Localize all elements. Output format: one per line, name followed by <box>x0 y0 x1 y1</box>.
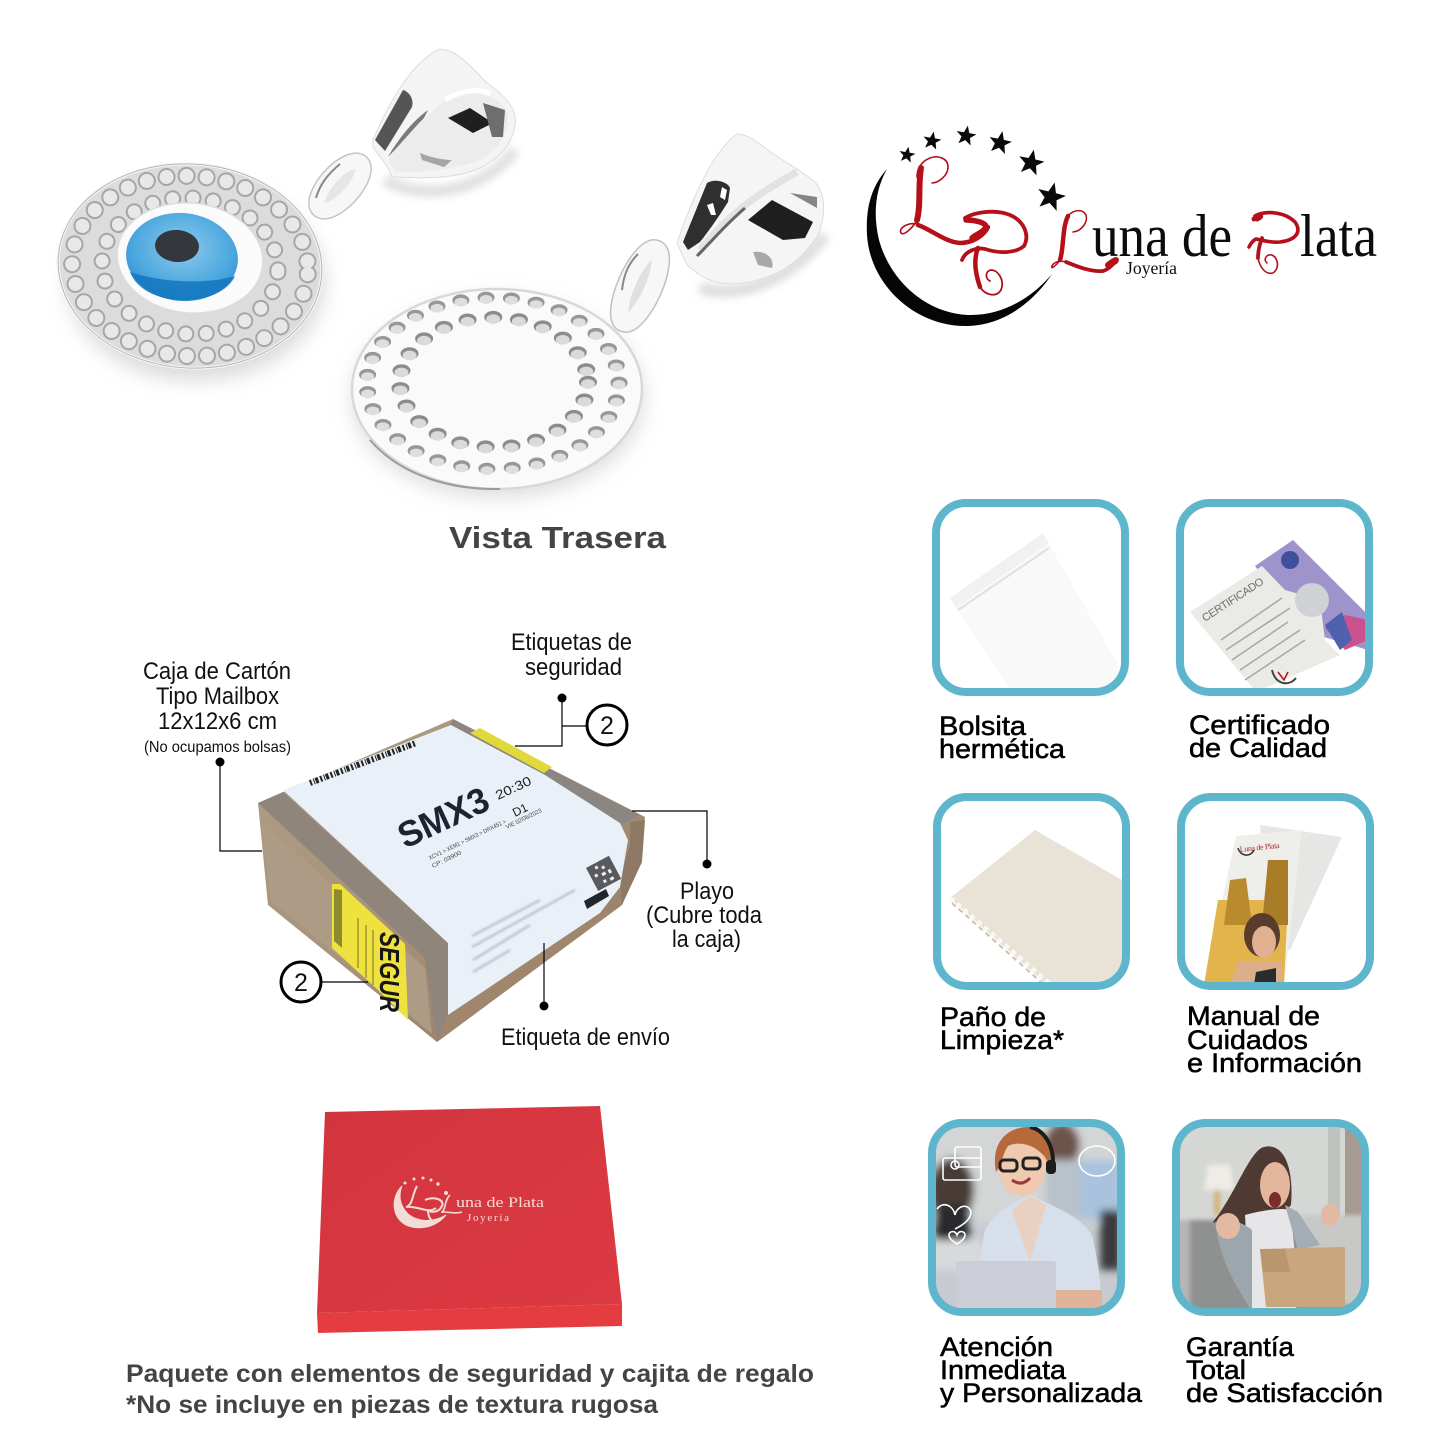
label: Certificado <box>1189 710 1330 740</box>
callout: Playo <box>632 811 763 953</box>
panel: Paño de Limpieza: Limpieza* <box>940 1025 1065 1055</box>
callout: Caja de Cartón: 12x12x6 cm <box>158 708 277 735</box>
callout: Caja de Cartón: Caja de Cartón <box>143 658 291 685</box>
label: Garantía <box>1186 1332 1295 1362</box>
box body <box>258 719 645 1042</box>
label: Paño de <box>940 1002 1046 1032</box>
bail <box>373 49 515 178</box>
icon: plastic bag <box>950 533 1050 611</box>
panel: Manual de Cuidados <box>1181 797 1370 1078</box>
heading: Vista Trasera: Vista Trasera <box>449 520 667 555</box>
callout: Playo: la caja) <box>672 926 741 953</box>
pendant: back view <box>352 134 825 498</box>
icon: certificate: CERTIFICADO <box>1200 575 1267 625</box>
red gift box: una de Plata <box>456 1195 544 1211</box>
panel: Atención Inmediata: y Personalizada <box>940 1378 1143 1408</box>
yellow security seal top <box>470 728 552 773</box>
callouts for box <box>143 629 763 1051</box>
panel: Manual de Cuidados: e Información <box>1187 1048 1362 1078</box>
label: Manual de <box>1187 1001 1320 1031</box>
callout: Caja de Cartón: (No ocupamos bolsas) <box>144 739 291 756</box>
panel: Atención Inmediata: Inmediata <box>940 1355 1067 1385</box>
callout: Etiqueta de envío <box>501 943 670 1051</box>
logo: Luna de Plata: Joyería <box>1126 258 1177 278</box>
panel: Paño de Limpieza <box>937 797 1126 1055</box>
gift box logo <box>394 1176 462 1228</box>
panel: Garantía Total: de Satisfacción <box>1186 1378 1383 1408</box>
shipping label <box>283 725 628 1015</box>
label text: SMX3 <box>391 779 495 856</box>
label: Atención <box>940 1332 1053 1362</box>
disc with stones <box>51 155 329 377</box>
icon: certificate <box>1190 540 1368 692</box>
crescent moon <box>867 169 1052 326</box>
panel: Bolsita hermética <box>936 503 1125 764</box>
shipping box photo: XCV1 > XEM1 > SMX3 > DRX451 > <box>428 819 508 862</box>
panel: Manual de Cuidados: Cuidados <box>1187 1025 1308 1055</box>
link ring <box>310 154 370 218</box>
shipping box photo: CP: 03900 <box>431 850 463 870</box>
pendant: front view with evil eye <box>51 49 515 380</box>
shipping box photo: 20:30 <box>493 773 534 803</box>
shipping box photo: SEGUR <box>374 932 405 1013</box>
callout: side seal count: 2 <box>294 969 308 997</box>
shipping box photo: VIE 02/06/2023 <box>505 808 543 831</box>
callout: Etiqueta de envío: Etiqueta de envío <box>501 1024 670 1051</box>
blurred address <box>472 890 575 972</box>
logo: Luna de Plata <box>867 124 1377 326</box>
icon: brochures <box>1204 825 1342 985</box>
panel: Bolsita hermética: hermética <box>939 734 1066 764</box>
caption: package: *No se incluye en piezas de textura rugosa <box>126 1391 659 1419</box>
panel: Certificado de Calidad <box>1180 503 1369 763</box>
QR code <box>586 856 621 891</box>
label: Bolsita <box>939 711 1027 741</box>
red gift box <box>317 1106 622 1333</box>
callout: Playo: Playo <box>680 878 734 905</box>
wordmark P <box>1249 213 1298 273</box>
shipping box photo: D1 <box>510 800 530 820</box>
stars <box>898 124 1068 212</box>
callout: Caja de Cartón <box>143 658 291 851</box>
photo: support agent <box>930 1123 1121 1313</box>
callout: Etiquetas de seguridad: seguridad <box>525 654 622 681</box>
callout: Etiquetas de seguridad <box>511 629 632 746</box>
wordmark L <box>1052 211 1116 271</box>
plastic wrap on top edges <box>258 792 448 1042</box>
caption: package: Paquete con elementos de seguridad y cajita de regalo <box>126 1360 814 1388</box>
callout: Playo: (Cubre toda <box>646 902 763 929</box>
callout: Caja de Cartón: Tipo Mailbox <box>156 683 279 710</box>
barcode <box>310 743 416 783</box>
bail <box>677 134 824 284</box>
icon: cleaning cloth <box>950 830 1122 992</box>
evil eye <box>112 196 268 320</box>
yellow security seal side <box>332 884 408 1020</box>
panel: Atención Inmediata <box>930 1123 1143 1408</box>
black tag <box>584 889 609 909</box>
logo: Luna de Plata: lata <box>1300 203 1377 269</box>
shipping box photo <box>258 719 645 1042</box>
link ring <box>612 244 668 328</box>
monogram LP <box>900 157 1026 295</box>
red gift box: Joyería <box>467 1212 509 1224</box>
callout: Etiquetas de seguridad: 2 <box>600 712 614 740</box>
panel: Garantía Total <box>1176 1123 1383 1408</box>
icon: brochures: Luna de Plata <box>1239 841 1280 854</box>
panel: Certificado de Calidad: de Calidad <box>1189 733 1327 763</box>
caption: package <box>126 1360 814 1419</box>
callout: side seal count <box>281 962 368 1002</box>
disc with holes <box>352 289 642 489</box>
photo: happy customer <box>1176 1123 1365 1312</box>
panel: Garantía Total: Total <box>1186 1355 1246 1385</box>
callout: Etiquetas de seguridad: Etiquetas de <box>511 629 632 656</box>
wordmark text: una de <box>1092 203 1232 269</box>
